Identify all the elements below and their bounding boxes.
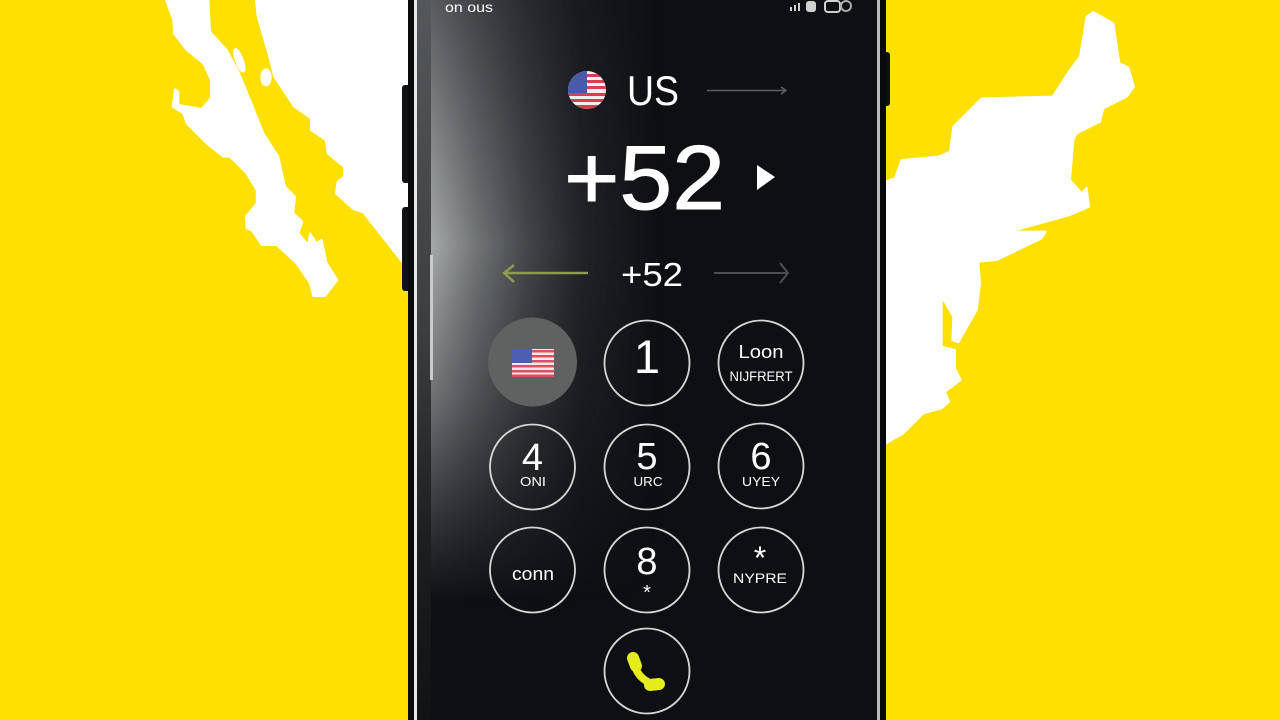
key: 5: URC <box>634 474 662 489</box>
key: star: NYPRE <box>733 570 787 586</box>
icon: round US flag <box>568 71 606 109</box>
side buttons <box>402 52 890 291</box>
arrow: thin right <box>707 87 786 94</box>
key: Loon Number: NIJFRERT <box>730 368 793 384</box>
screen frame lines <box>414 0 880 720</box>
country row: flag, US, arrow <box>568 71 788 109</box>
key: 4 <box>490 424 575 510</box>
key: Loon Number <box>718 320 804 406</box>
key: 5: 5 <box>636 436 658 478</box>
label: +52: +52 <box>621 256 683 293</box>
key: 6: UYEY <box>742 474 780 489</box>
key: 5 <box>604 424 690 510</box>
key: 8: * <box>643 582 651 604</box>
key: 6: 6 <box>750 436 772 478</box>
map: Baja California and western Mexico <box>166 0 413 296</box>
key: conn <box>490 528 575 612</box>
key: flag <box>488 318 577 406</box>
key: star <box>718 528 804 612</box>
key: 6 <box>718 424 804 508</box>
key: 8: 8 <box>636 541 658 583</box>
phone body <box>408 0 886 720</box>
smartphone <box>402 0 890 720</box>
label: US: US <box>627 67 679 114</box>
screen left bezel <box>417 0 431 720</box>
keypad <box>488 318 804 714</box>
screen <box>417 0 879 720</box>
map: eastern United States <box>880 12 1134 447</box>
arrow: grey right <box>714 263 788 283</box>
key: star: * <box>754 540 766 576</box>
arrow: olive left <box>504 265 588 282</box>
key: call <box>604 628 690 714</box>
key: Loon Number: Loon <box>738 342 784 362</box>
key: 8 <box>604 528 690 612</box>
arrow: white triangle <box>757 165 775 190</box>
key: 4: 4 <box>522 437 543 479</box>
key: 1: 1 <box>634 330 660 383</box>
secondary code row <box>504 256 788 293</box>
icon: yellow phone handset <box>633 658 659 685</box>
screen light reflection <box>431 0 629 586</box>
key: conn: conn <box>512 564 554 584</box>
reflection edge line <box>430 255 433 380</box>
status bar icons <box>790 1 851 12</box>
main code +52: +52 <box>564 128 725 229</box>
key: 1 <box>604 320 690 406</box>
key: 4: ONI <box>520 474 546 489</box>
